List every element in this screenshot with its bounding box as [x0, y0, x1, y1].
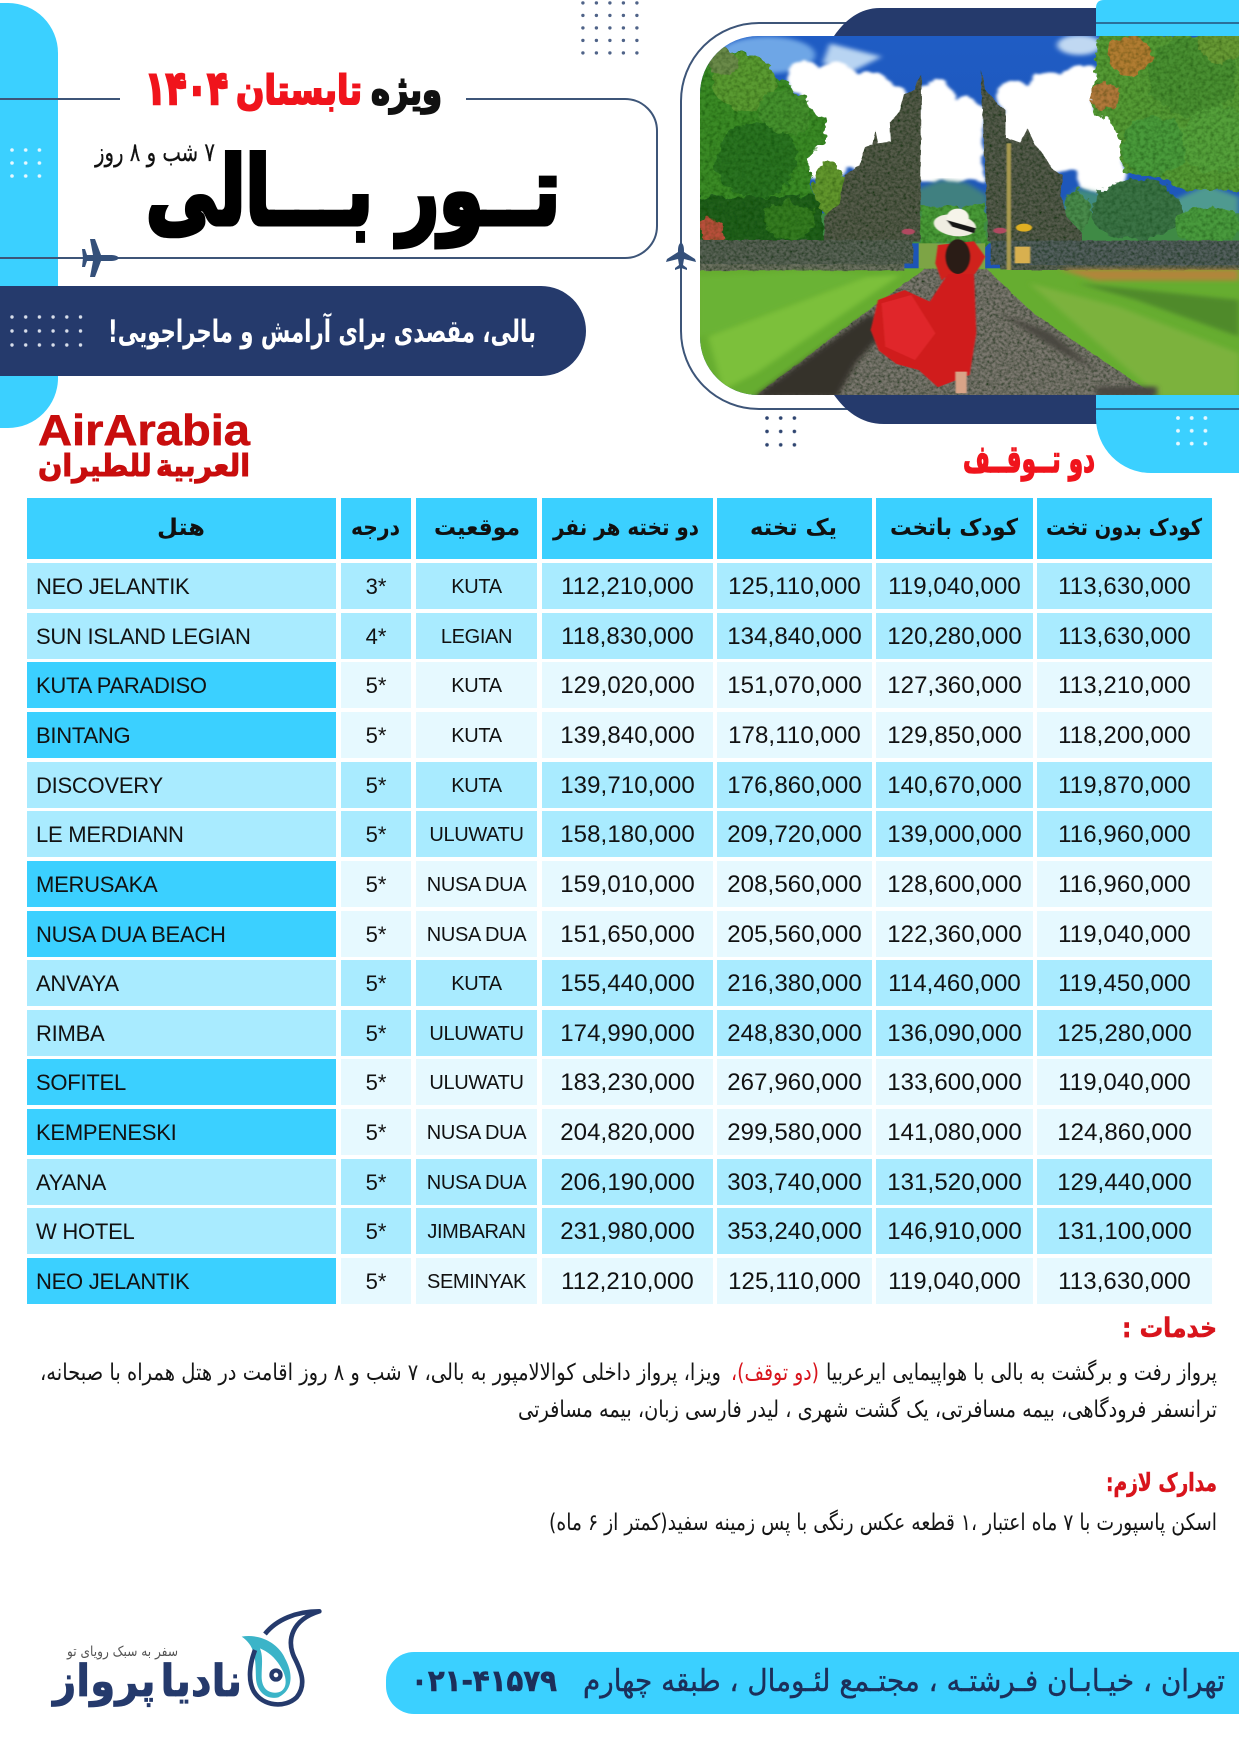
services text: (دو توقف)،: [731, 1360, 819, 1386]
photo: Bali temple gate with woman in red dress: [693, 23, 1239, 400]
row: AYANA: AYANA: [36, 1170, 106, 1195]
icon: plane on photo frame: [666, 242, 696, 270]
row: AYANA: [27, 1159, 1212, 1205]
row: ANVAYA: ANVAYA: [36, 971, 119, 996]
row: SUN ISLAND LEGIAN: 120,280,000: [887, 623, 1022, 650]
table body: [27, 563, 1212, 1304]
row: DISCOVERY: 5*: [366, 773, 386, 798]
woman: [871, 273, 976, 387]
row: AYANA: 303,740,000: [727, 1169, 862, 1196]
row: NEO JELANTIK 5: NEO JELANTIK: [36, 1269, 189, 1294]
base ground: [697, 268, 1239, 400]
row: RIMBA: RIMBA: [36, 1021, 104, 1046]
row: ANVAYA: 5*: [366, 971, 386, 996]
row: W HOTEL: 146,910,000: [887, 1218, 1022, 1245]
row: BINTANG: BINTANG: [36, 723, 130, 748]
row: KUTA PARADISO: 129,020,000: [560, 672, 695, 699]
row: KUTA PARADISO: 127,360,000: [887, 672, 1022, 699]
row: MERUSAKA: 159,010,000: [560, 871, 695, 898]
row: ANVAYA: KUTA: [451, 973, 502, 995]
decorative navy and blue bars around photo: [834, 0, 1239, 473]
row: KEMPENESKI: [27, 1109, 1212, 1155]
row: SOFITEL: 183,230,000: [560, 1069, 695, 1096]
row: RIMBA: 174,990,000: [560, 1020, 695, 1047]
table header: درجه: [351, 515, 400, 541]
row: MERUSAKA: 5*: [366, 872, 386, 897]
row: NEO JELANTIK 5: 112,210,000: [561, 1268, 694, 1295]
row: NEO JELANTIK 5: 119,040,000: [888, 1268, 1021, 1295]
row: LE MERDIANN: 209,720,000: [727, 821, 862, 848]
logo: Air Arabia: العربية للطيران: [38, 449, 250, 484]
row: RIMBA: 136,090,000: [887, 1020, 1022, 1047]
row: BINTANG: 178,110,000: [728, 722, 861, 749]
row: ANVAYA: 216,380,000: [727, 970, 862, 997]
row: SUN ISLAND LEGIAN: LEGIAN: [441, 626, 512, 648]
dot grid top: [581, 0, 641, 56]
row: NEO JELANTIK 5: 125,110,000: [728, 1268, 861, 1295]
row: KEMPENESKI: KEMPENESKI: [36, 1120, 177, 1145]
row: MERUSAKA: [27, 861, 1212, 907]
logo: Nadia Parvaz: [51, 1611, 319, 1707]
dot grid below photo: [765, 416, 798, 455]
panel: address bar: [386, 1652, 1239, 1714]
row: KUTA PARADISO: [27, 662, 1212, 708]
dot grid on slogan pill: [10, 315, 83, 357]
row: DISCOVERY: 140,670,000: [887, 772, 1022, 799]
row: LE MERDIANN: 116,960,000: [1058, 821, 1191, 848]
row: SUN ISLAND LEGIAN: 134,840,000: [727, 623, 862, 650]
row: NUSA DUA BEACH: 151,650,000: [560, 920, 695, 948]
row: KUTA PARADISO: 151,070,000: [727, 672, 862, 699]
table header: موقعیت: [434, 515, 520, 541]
row: SOFITEL: [27, 1059, 1212, 1105]
logo: Nadia Parvaz: نادیا پرواز: [51, 1656, 242, 1707]
row: LE MERDIANN: 158,180,000: [560, 821, 695, 848]
main title: تــور بـــالی: [146, 138, 560, 247]
row: SUN ISLAND LEGIAN: SUN ISLAND LEGIAN: [36, 624, 251, 649]
logo: Nadia Parvaz: سفر به سبک رویای تو: [66, 1644, 178, 1660]
table header: کودک بدون تخت: [1046, 515, 1203, 541]
heading: summer special: ویژه: [371, 68, 442, 114]
row: W HOTEL: [27, 1208, 1212, 1254]
row: RIMBA: [27, 1010, 1212, 1056]
panel: navy slogan pill: [0, 286, 586, 376]
dot grid on blue strip: [10, 148, 42, 180]
row: SUN ISLAND LEGIAN: 4*: [366, 624, 386, 649]
row: KEMPENESKI: 5*: [366, 1120, 386, 1145]
row: MERUSAKA: 128,600,000: [887, 871, 1022, 898]
row: AYANA: 5*: [366, 1170, 386, 1195]
row: MERUSAKA: 208,560,000: [727, 871, 862, 898]
row: AYANA: 129,440,000: [1057, 1169, 1192, 1196]
row: W HOTEL: 353,240,000: [727, 1218, 862, 1245]
heading: summer special: تابستان: [236, 68, 362, 114]
documents text: اسکن پاسپورت با ۷ ماه اعتبار ،۱ قطعه عکس رنگی با پس زمینه سفید(کمتر از ۶ ماه): [549, 1509, 1217, 1536]
row: NUSA DUA BEACH: NUSA DUA: [427, 924, 526, 946]
row: DISCOVERY: 176,860,000: [727, 772, 862, 799]
row: ANVAYA: 119,450,000: [1058, 970, 1191, 997]
row: DISCOVERY: DISCOVERY: [36, 773, 163, 798]
panel: left blue strip: [0, 3, 58, 428]
icon: plane on title frame: [82, 239, 119, 277]
row: NEO JELANTIK 5: [27, 1258, 1212, 1304]
row: NEO JELANTIK 5: SEMINYAK: [427, 1271, 526, 1293]
services text: ویزا، پرواز داخلی کوالالامپور به بالی، ۷ شب و ۸ روز اقامت در هتل همراه با صبحانه،: [40, 1360, 721, 1386]
row: MERUSAKA: 116,960,000: [1058, 871, 1191, 898]
heading: summer special: [145, 61, 442, 115]
row: MERUSAKA: MERUSAKA: [36, 872, 157, 897]
row: RIMBA: ULUWATU: [429, 1023, 524, 1045]
row: AYANA: 206,190,000: [560, 1169, 695, 1196]
row: DISCOVERY: 119,870,000: [1058, 772, 1191, 799]
gate: [824, 75, 922, 242]
row: BINTANG: 5*: [366, 723, 386, 748]
row: NEO JELANTIK 3: 119,040,000: [888, 573, 1021, 600]
row: ANVAYA: [27, 960, 1212, 1006]
row: NEO JELANTIK 5: 113,630,000: [1058, 1268, 1191, 1295]
dot grid on lower blue block: [1176, 416, 1209, 454]
row: DISCOVERY: KUTA: [451, 775, 502, 797]
row: W HOTEL: 231,980,000: [560, 1218, 695, 1245]
title frame line: [0, 99, 657, 258]
table header: کودک باتخت: [890, 515, 1019, 541]
row: KEMPENESKI: 124,860,000: [1057, 1119, 1192, 1146]
row: BINTANG: KUTA: [451, 725, 502, 747]
services text: [40, 1359, 1217, 1423]
row: KEMPENESKI: 299,580,000: [727, 1119, 862, 1146]
row: AYANA: 131,520,000: [887, 1169, 1022, 1196]
row: NUSA DUA BEACH: 119,040,000: [1058, 920, 1191, 948]
heading: summer special: ۱۴۰۴: [145, 61, 228, 115]
row: W HOTEL: 131,100,000: [1057, 1218, 1192, 1245]
duration label: ۷ شب و ۸ روز: [93, 138, 215, 168]
background foliage strip: [697, 213, 1239, 243]
slogan text: بالی، مقصدی برای آرامش و ماجراجویی!: [108, 312, 536, 350]
row: NUSA DUA BEACH: 205,560,000: [727, 920, 862, 948]
road: [752, 269, 1159, 398]
trees right: [700, 23, 1239, 243]
row: NEO JELANTIK 3: KUTA: [451, 576, 502, 598]
heading: services: خدمات :: [1122, 1313, 1217, 1344]
row: KUTA PARADISO: 113,210,000: [1058, 672, 1191, 699]
row: BINTANG: 129,850,000: [887, 722, 1022, 749]
row: BINTANG: 118,200,000: [1058, 722, 1191, 749]
wall: [697, 240, 913, 264]
row: NUSA DUA BEACH: 5*: [366, 922, 386, 946]
row: ANVAYA: 114,460,000: [888, 970, 1021, 997]
row: LE MERDIANN: LE MERDIANN: [36, 822, 184, 847]
row: KUTA PARADISO: 5*: [366, 673, 386, 698]
row: RIMBA: 5*: [366, 1021, 386, 1046]
row: NUSA DUA BEACH: 122,360,000: [887, 920, 1022, 948]
row: NEO JELANTIK 3: NEO JELANTIK: [36, 574, 189, 599]
row: SOFITEL: SOFITEL: [36, 1070, 126, 1095]
row: KEMPENESKI: 204,820,000: [560, 1119, 695, 1146]
row: BINTANG: [27, 712, 1212, 758]
photo frame line: [681, 23, 860, 409]
row: NUSA DUA BEACH: [27, 911, 1212, 957]
row: KEMPENESKI: NUSA DUA: [427, 1122, 526, 1144]
row: KUTA PARADISO: KUTA: [451, 675, 502, 697]
row: KEMPENESKI: 141,080,000: [887, 1119, 1022, 1146]
row: W HOTEL: JIMBARAN: [427, 1221, 526, 1243]
row: RIMBA: 125,280,000: [1057, 1020, 1192, 1047]
row: MERUSAKA: NUSA DUA: [427, 874, 526, 896]
row: W HOTEL: W HOTEL: [36, 1219, 134, 1244]
row: LE MERDIANN: 139,000,000: [887, 821, 1022, 848]
row: SUN ISLAND LEGIAN: 118,830,000: [561, 623, 694, 650]
table header: دو تخته هر نفر: [552, 515, 699, 541]
row: NEO JELANTIK 3: 125,110,000: [728, 573, 861, 600]
row: W HOTEL: 5*: [366, 1219, 386, 1244]
row: SOFITEL: 119,040,000: [1058, 1069, 1191, 1096]
logo: Air Arabia: AirArabia: [38, 406, 251, 455]
banners: [1007, 143, 1011, 270]
row: NEO JELANTIK 3: [27, 563, 1212, 609]
row: NEO JELANTIK 3: 112,210,000: [561, 573, 694, 600]
row: SOFITEL: 133,600,000: [887, 1069, 1022, 1096]
row: RIMBA: 248,830,000: [727, 1020, 862, 1047]
row: SOFITEL: 5*: [366, 1070, 386, 1095]
table header: یک تخته: [750, 515, 837, 541]
trees left: [693, 48, 826, 243]
logo: Air Arabia: [38, 406, 251, 484]
row: LE MERDIANN: [27, 811, 1212, 857]
table header: هتل: [157, 515, 205, 541]
row: DISCOVERY: 139,710,000: [560, 772, 695, 799]
row: BINTANG: 139,840,000: [560, 722, 695, 749]
row: SOFITEL: 267,960,000: [727, 1069, 862, 1096]
row: NUSA DUA BEACH: NUSA DUA BEACH: [36, 922, 226, 946]
row: NEO JELANTIK 3: 113,630,000: [1058, 573, 1191, 600]
row: AYANA: NUSA DUA: [427, 1172, 526, 1194]
row: SUN ISLAND LEGIAN: [27, 613, 1212, 659]
row: SUN ISLAND LEGIAN: 113,630,000: [1058, 623, 1191, 650]
row: LE MERDIANN: ULUWATU: [429, 824, 524, 846]
table header: [27, 498, 1212, 559]
row: ANVAYA: 155,440,000: [560, 970, 695, 997]
row: DISCOVERY: [27, 762, 1212, 808]
row: SOFITEL: ULUWATU: [429, 1072, 524, 1094]
grass: [782, 269, 834, 271]
label: two stops: دو تــوقــف: [963, 437, 1095, 482]
row: NEO JELANTIK 5: 5*: [366, 1269, 386, 1294]
row: NEO JELANTIK 3: 3*: [366, 574, 386, 599]
phone number: ۰۲۱-۴۱۵۷۹: [411, 1664, 557, 1699]
row: LE MERDIANN: 5*: [366, 822, 386, 847]
row: KUTA PARADISO: KUTA PARADISO: [36, 673, 207, 698]
